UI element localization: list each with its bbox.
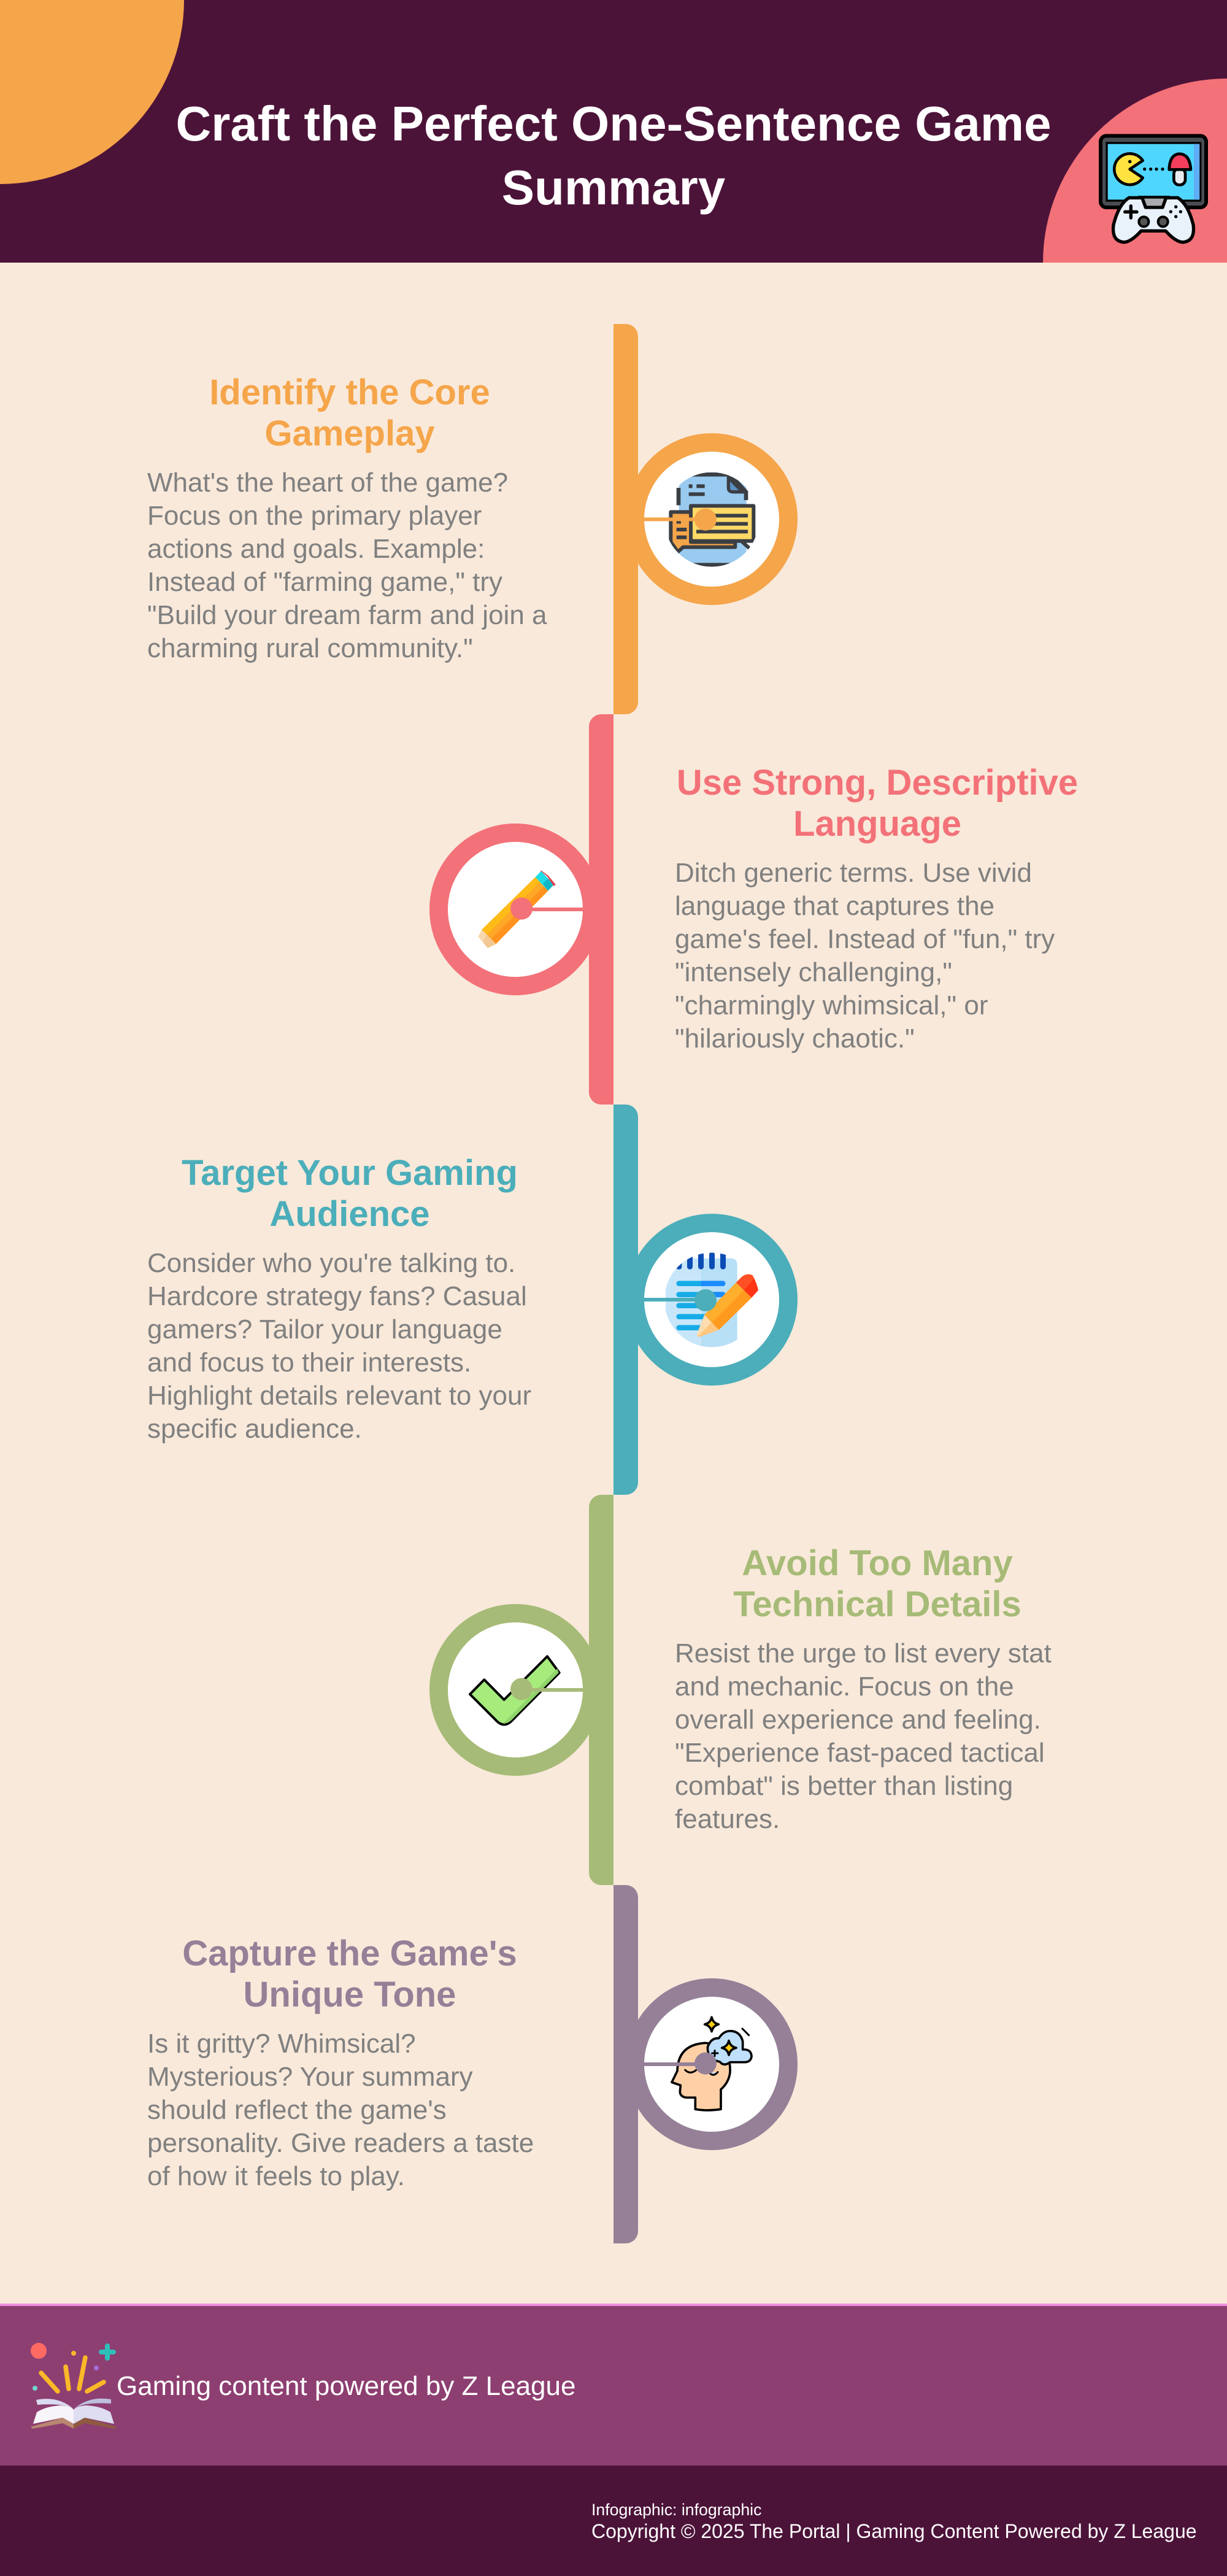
infographic label: Infographic: infographic [591, 2501, 761, 2519]
heading and body text: "hilariously chaotic." [675, 1024, 915, 1054]
heading and body text: "Build your dream farm and join a [147, 600, 547, 630]
heading and body text: Instead of "farming game," try [147, 567, 502, 597]
timeline bar [614, 1105, 638, 1495]
heading and body text: Technical Details [733, 1584, 1021, 1624]
timeline bar [614, 324, 638, 714]
heading and body text: Unique Tone [244, 1975, 456, 2015]
title: Craft the Perfect One-Sentence Game [175, 96, 1052, 151]
sponsor band [0, 2304, 1227, 2466]
heading and body text: Target Your Gaming [182, 1153, 518, 1193]
heading and body text: overall experience and feeling. [675, 1705, 1041, 1735]
heading and body text: Is it gritty? Whimsical? [147, 2029, 416, 2059]
heading and body text: Identify the Core [209, 372, 490, 412]
sponsor text: Gaming content powered by Z League [117, 2371, 575, 2401]
title: Summary [502, 160, 725, 215]
icon: game screen and controller [1099, 134, 1208, 244]
timeline bar [589, 714, 614, 1105]
step 5: capture the game's unique tone [147, 1885, 798, 2243]
heading and body text: Highlight details relevant to your [147, 1381, 531, 1411]
heading and body text: Avoid Too Many [742, 1543, 1013, 1583]
heading and body text: Capture the Game's [182, 1934, 517, 1973]
heading and body text [675, 1543, 1052, 1834]
step 2: use strong, descriptive language [429, 714, 1078, 1105]
heading and body text: specific audience. [147, 1414, 362, 1444]
header band [0, 0, 1227, 263]
heading and body text [675, 763, 1078, 1054]
heading and body text: Gameplay [264, 414, 435, 453]
footer credits [591, 2501, 1197, 2542]
heading and body text: Mysterious? Your summary [147, 2062, 473, 2092]
timeline bar [589, 1495, 614, 1885]
decorative pink corner [1043, 79, 1227, 263]
heading and body text: "intensely challenging," [675, 957, 952, 987]
heading and body text: Language [793, 804, 961, 844]
heading and body text: Use Strong, Descriptive [677, 763, 1078, 803]
heading and body text: Ditch generic terms. Use vivid [675, 858, 1032, 888]
heading and body text: gamers? Tailor your language [147, 1314, 502, 1344]
heading and body text [147, 372, 547, 663]
step 3: target your gaming audience [147, 1105, 798, 1495]
heading and body text: "Experience fast-paced tactical [675, 1738, 1045, 1768]
heading and body text: should reflect the game's [147, 2095, 447, 2125]
title [175, 96, 1052, 215]
heading and body text: of how it feels to play. [147, 2161, 405, 2191]
heading and body text: Audience [269, 1194, 430, 1234]
heading and body text: language that captures the [675, 891, 994, 921]
icon: pencil in ring [429, 823, 589, 995]
copyright line: Copyright © 2025 The Portal | Gaming Content Powered by Z League [591, 2520, 1197, 2542]
heading and body text: Focus on the primary player [147, 501, 482, 531]
step 4: avoid too many technical details [429, 1495, 1052, 1885]
icon: head with cloud and sparkles in ring [638, 1978, 798, 2150]
heading and body text: game's feel. Instead of "fun," try [675, 924, 1055, 954]
footer band [0, 2466, 1227, 2576]
heading and body text: Consider who you're talking to. [147, 1248, 515, 1278]
icon: check mark in ring [429, 1604, 589, 1776]
icon: notepad and pencil in ring [638, 1214, 798, 1386]
heading and body text: features. [675, 1804, 780, 1834]
icon: documents and chat bubble in ring [638, 433, 798, 605]
heading and body text: actions and goals. Example: [147, 534, 485, 564]
heading and body text: Hardcore strategy fans? Casual [147, 1281, 527, 1311]
timeline bar [614, 1885, 638, 2243]
heading and body text: charming rural community." [147, 633, 473, 663]
heading and body text: personality. Give readers a taste [147, 2128, 534, 2158]
heading and body text: What's the heart of the game? [147, 468, 508, 498]
heading and body text: and mechanic. Focus on the [675, 1672, 1014, 1702]
heading and body text: "charmingly whimsical," or [675, 990, 988, 1020]
step 1: identify the core gameplay [147, 324, 798, 714]
heading and body text: and focus to their interests. [147, 1348, 471, 1378]
heading and body text: Resist the urge to list every stat [675, 1638, 1052, 1668]
icon: open book with sparks [31, 2343, 117, 2429]
heading and body text: combat" is better than listing [675, 1771, 1013, 1801]
heading and body text [147, 1934, 534, 2191]
heading and body text [147, 1153, 531, 1444]
decorative orange corner [0, 0, 184, 184]
